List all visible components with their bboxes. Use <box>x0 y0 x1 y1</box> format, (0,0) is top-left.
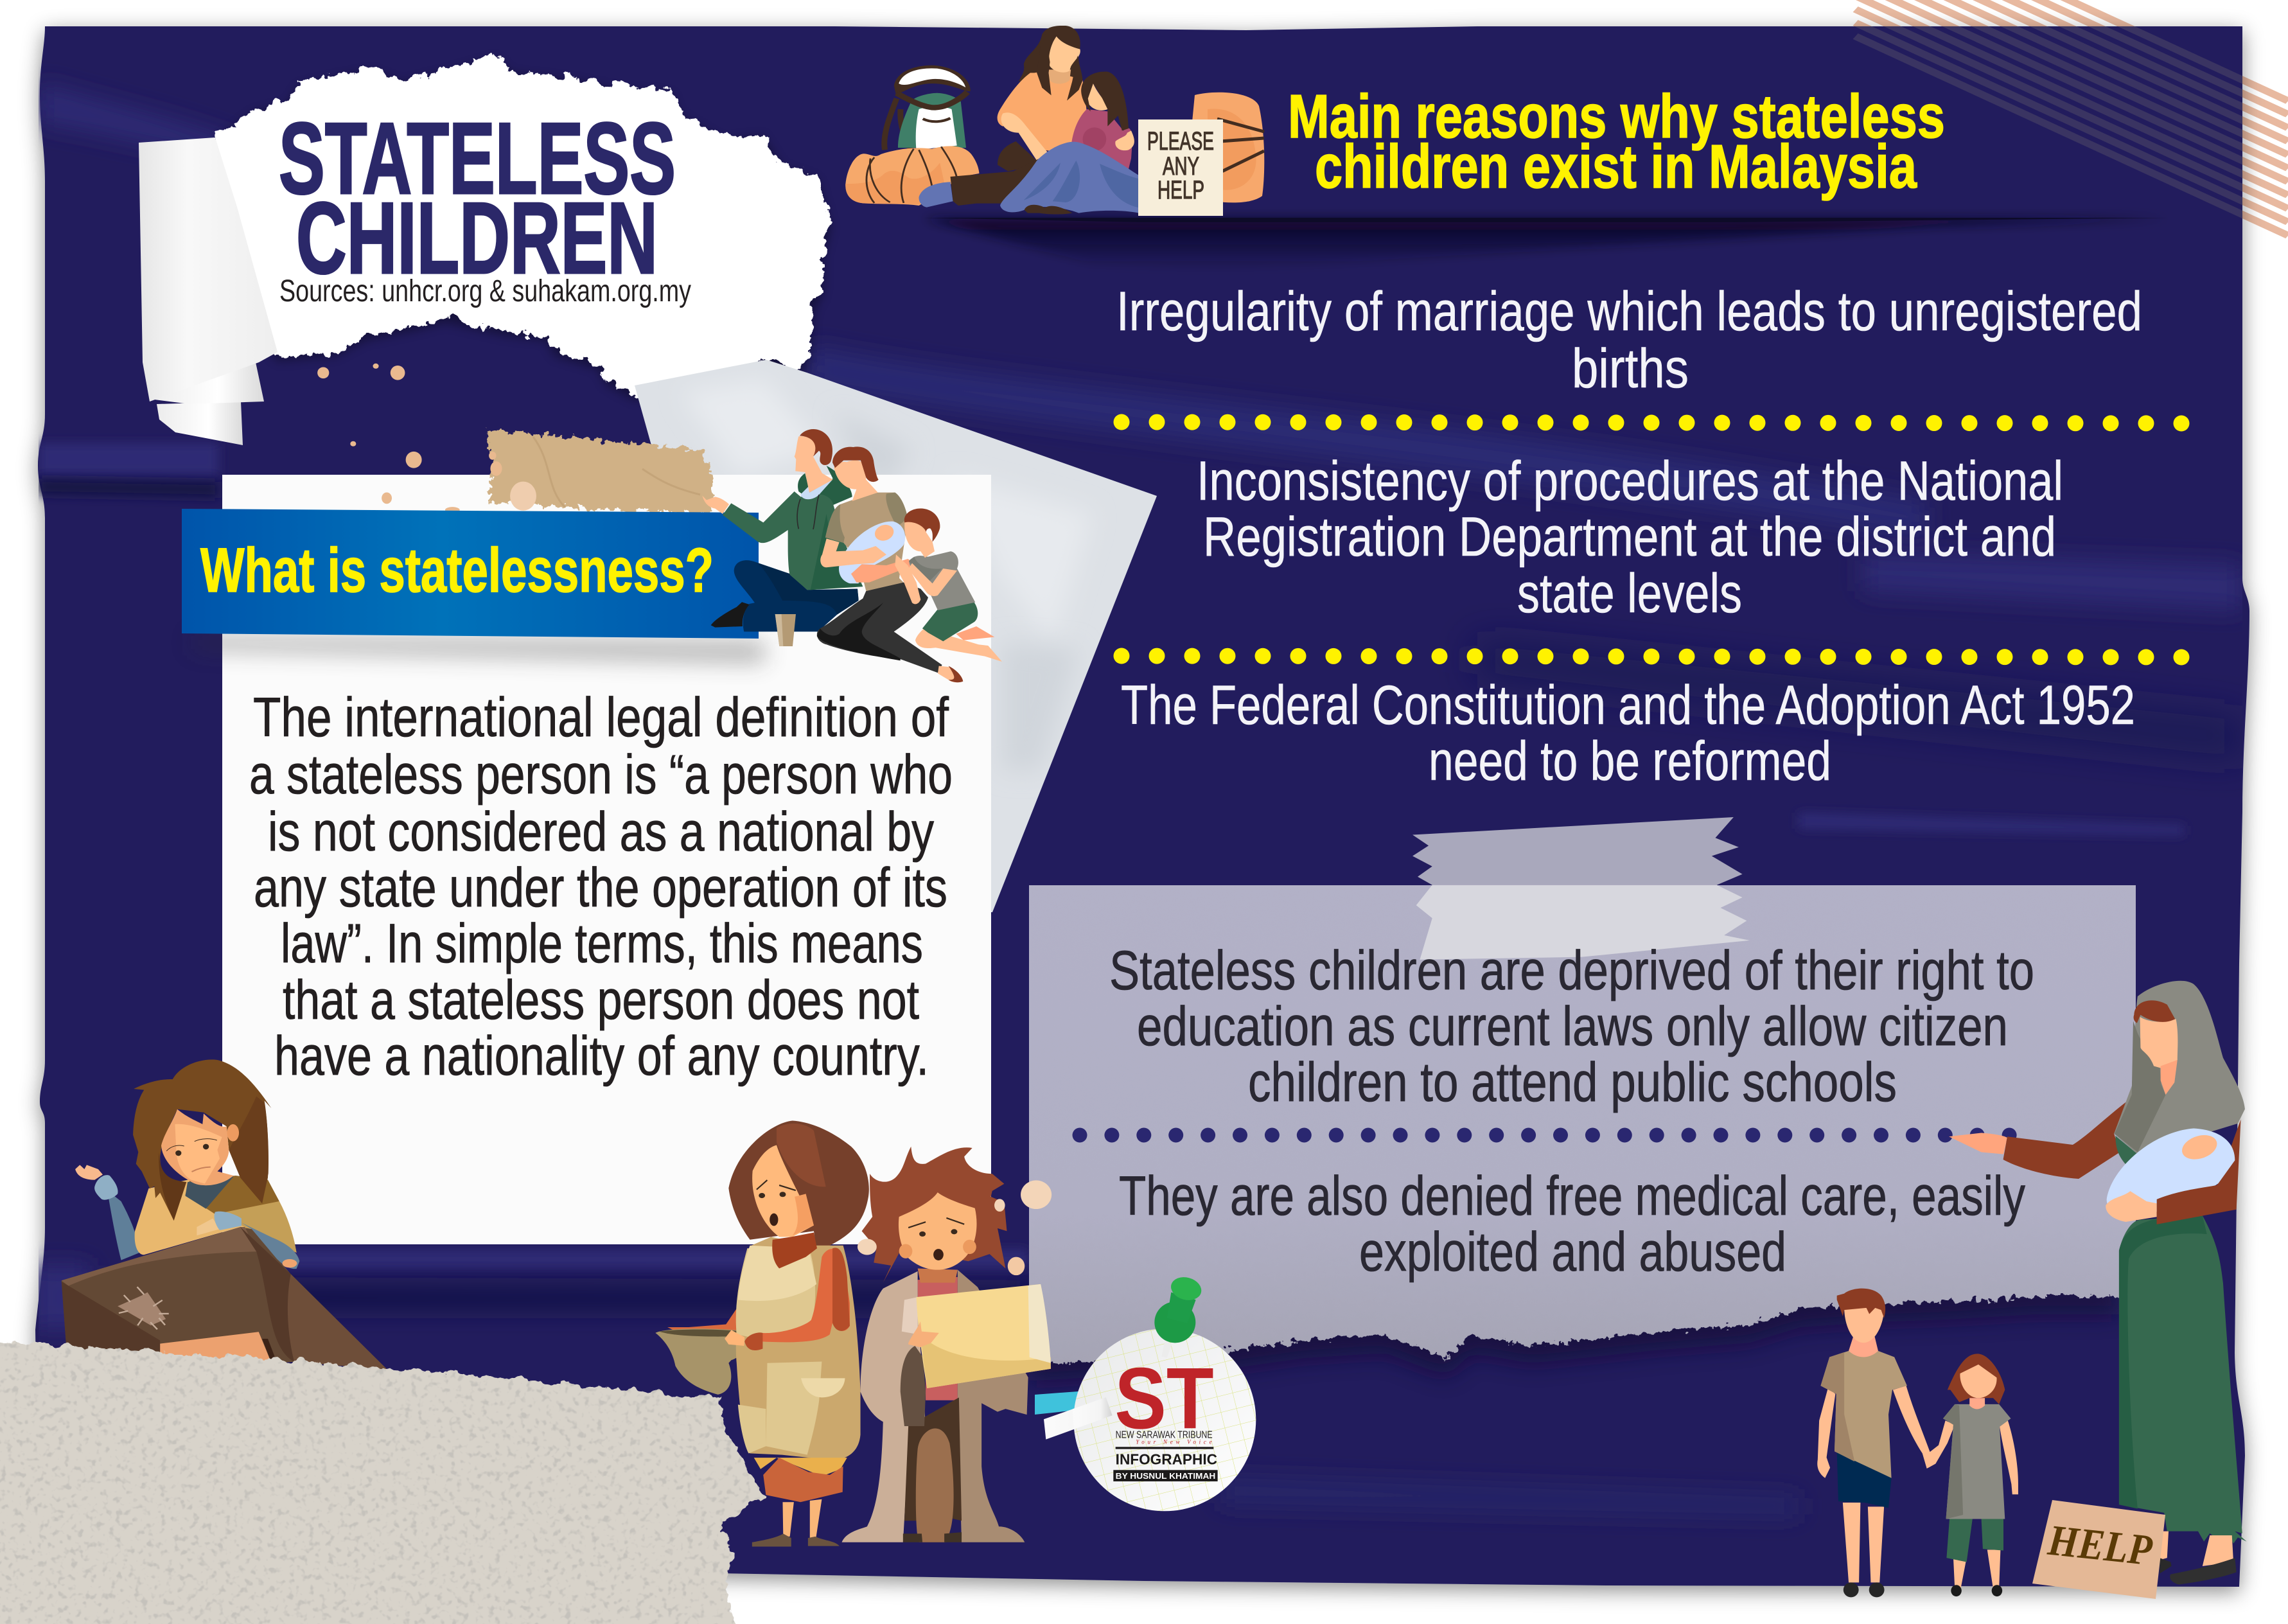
definition paragraph: a stateless person is “a person who <box>249 744 953 806</box>
definition paragraph: that a stateless person does not <box>283 969 919 1031</box>
badge wordmark: BY HUSNUL KHATIMAH <box>1116 1471 1215 1481</box>
title: STATELESS <box>279 102 676 215</box>
sign: please any help: PLEASE <box>1147 127 1214 155</box>
reason 1 text <box>1116 281 2142 400</box>
decorative tape stripes over navy <box>1852 26 2242 218</box>
reason 3 text: need to be reformed <box>1429 730 1831 792</box>
brown paper tape <box>487 430 714 514</box>
badge wordmark: INFOGRAPHIC <box>1116 1451 1217 1467</box>
header underline shadow <box>923 218 2169 270</box>
sign: please any help <box>1138 119 1223 216</box>
logo: New Sarawak Tribune infographic badge <box>1035 1274 1256 1511</box>
panel: consequences torn lilac paper <box>1002 817 2171 1381</box>
heading: main reasons: Main reasons why stateless <box>1288 82 1945 151</box>
crumbs of paper <box>245 354 536 513</box>
title <box>279 102 676 295</box>
definition paragraph: law”. In simple terms, this means <box>281 913 923 975</box>
consequences text: medical care: They are also denied free medical care, easily <box>1119 1165 2025 1227</box>
large grey paper tape bottom left <box>0 1336 762 1624</box>
badge disc <box>1073 1328 1256 1511</box>
heading: main reasons <box>1288 82 1945 201</box>
badge wordmark <box>1113 1349 1218 1481</box>
reason 2 text: state levels <box>1517 563 1742 624</box>
consequences text: medical care <box>1119 1165 2025 1283</box>
definition paragraph: any state under the operation of its <box>254 857 947 919</box>
consequences text: education <box>1109 940 2034 1113</box>
definition paragraph: is not considered as a national by <box>268 801 934 863</box>
lilac paper <box>1002 861 2171 1364</box>
reason 1 text: births <box>1572 338 1689 400</box>
badge wordmark: ST <box>1114 1349 1214 1447</box>
consequences text: education: Stateless children are deprived of their right to <box>1109 940 2034 1002</box>
page curl of torn paper <box>139 137 277 445</box>
definition paragraph: The international legal definition of <box>253 687 949 748</box>
banner: what is statelessness <box>182 509 764 662</box>
green push pin <box>1154 1274 1204 1357</box>
illustration: orange bundle <box>1192 93 1264 202</box>
yellow dotted separator 2 <box>1122 656 2181 657</box>
illustration: beggar woman with hat and child with paper <box>655 1121 1052 1546</box>
definition paragraph: have a nationality of any country. <box>274 1025 929 1087</box>
white definition card <box>222 475 991 1244</box>
illustration: bags and seated mother with child <box>845 26 1139 215</box>
consequences text: education: children to attend public schools <box>1248 1052 1897 1113</box>
sign: please any help: ANY <box>1163 152 1199 181</box>
sources line: Sources: unhcr.org & suhakam.org.my <box>279 274 691 308</box>
illustration: family on definition card <box>702 429 1002 682</box>
consequences text: medical care: exploited and abused <box>1359 1221 1786 1283</box>
illustration: beggar girl with patched sack <box>62 1059 387 1375</box>
reason 2 text <box>1197 450 2063 624</box>
panel: what is statelessness definition <box>222 475 991 1244</box>
yellow dotted separator 1 <box>1122 422 2181 423</box>
badge wordmark: NEW SARAWAK TRIBUNE <box>1116 1429 1213 1440</box>
illustration: boy and girl holding hands <box>1817 1289 2018 1597</box>
badge wordmark: Your New Voice <box>1136 1439 1212 1445</box>
reason 2 text: Registration Department at the district and <box>1203 506 2056 568</box>
panel: torn white title paper <box>193 55 831 400</box>
heading: main reasons: children exist in Malaysia <box>1315 132 1917 201</box>
title: CHILDREN <box>296 182 658 295</box>
blue and white tape strips <box>1035 1391 1113 1440</box>
banner: what is statelessness: What is statelessness? <box>200 535 714 605</box>
consequences text: education: education as current laws only allow citizen <box>1137 996 2008 1057</box>
torn edge shadow <box>1029 1285 2119 1381</box>
reason 2 text: Inconsistency of procedures at the National <box>1197 450 2063 512</box>
decorative striped tape top right <box>1856 0 2288 236</box>
definition paragraph <box>249 687 953 1087</box>
navy dotted separator <box>1080 1128 2039 1142</box>
sign: help cardboard <box>2032 1500 2165 1599</box>
illustration: mother with baby pointing <box>1949 981 2247 1585</box>
panel: main reasons <box>923 82 2181 792</box>
sign: please any help: HELP <box>1157 176 1204 204</box>
crumpled grey paper behind definition panel <box>629 353 1163 919</box>
reason 3 text <box>1121 675 2135 792</box>
translucent tape on lilac paper <box>1412 817 1750 960</box>
white tape tip over badge <box>1073 1397 1113 1429</box>
sign: help cardboard: HELP <box>2045 1515 2154 1575</box>
